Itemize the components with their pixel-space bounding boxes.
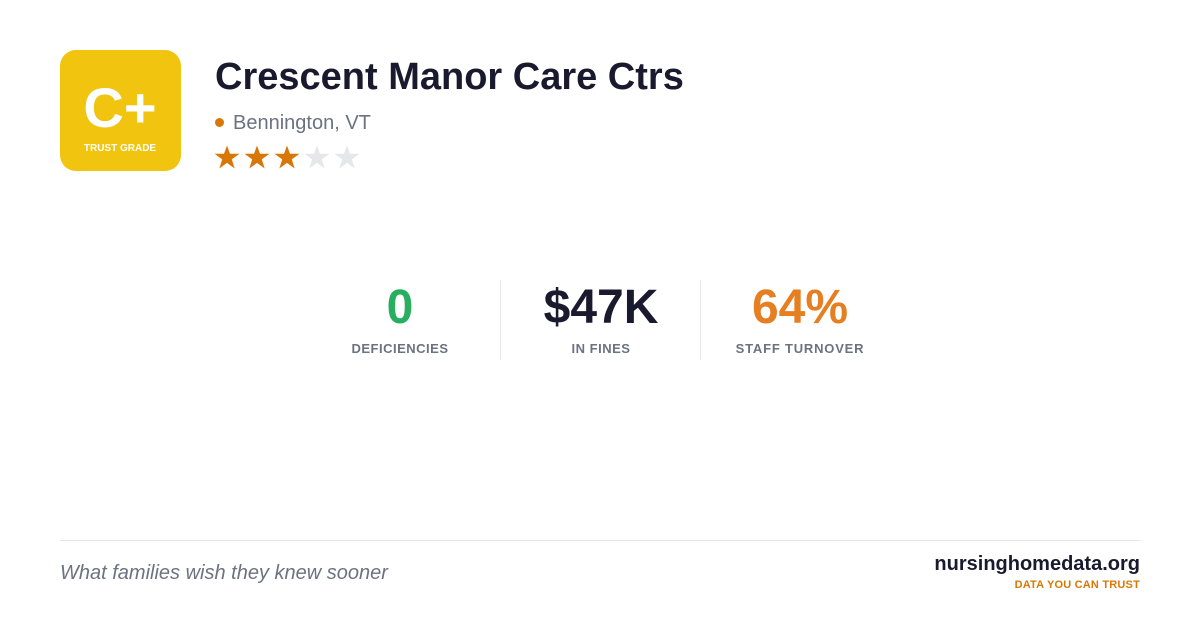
star 4 empty — [304, 146, 330, 168]
deficiencies label: DEFICIENCIES — [351, 341, 448, 356]
stat: deficiencies — [351, 281, 448, 356]
fines value: $47K — [544, 281, 658, 334]
brand tagline: DATA YOU CAN TRUST — [1015, 579, 1140, 591]
location — [215, 112, 371, 134]
star rating — [214, 146, 359, 168]
star 1 filled — [214, 146, 240, 168]
grade letter: C+ — [83, 76, 157, 139]
stat: fines — [544, 281, 658, 356]
fines label: IN FINES — [572, 341, 630, 356]
turnover value: 64% — [752, 281, 848, 334]
deficiencies value: 0 — [387, 281, 413, 334]
brand name: nursinghomedata.org — [934, 553, 1140, 575]
star 5 empty — [334, 146, 360, 168]
star 3 filled — [274, 146, 300, 168]
stat: staff turnover — [736, 281, 864, 356]
tagline: What families wish they knew sooner — [60, 562, 388, 584]
title: Crescent Manor Care Ctrs — [215, 56, 684, 98]
brand block — [934, 553, 1140, 591]
grade caption: TRUST GRADE — [84, 143, 156, 154]
turnover label: STAFF TURNOVER — [736, 341, 864, 356]
star 2 filled — [244, 146, 270, 168]
location text: Bennington, VT — [233, 112, 371, 134]
grade badge — [60, 50, 181, 171]
icon: location dot — [215, 118, 224, 127]
